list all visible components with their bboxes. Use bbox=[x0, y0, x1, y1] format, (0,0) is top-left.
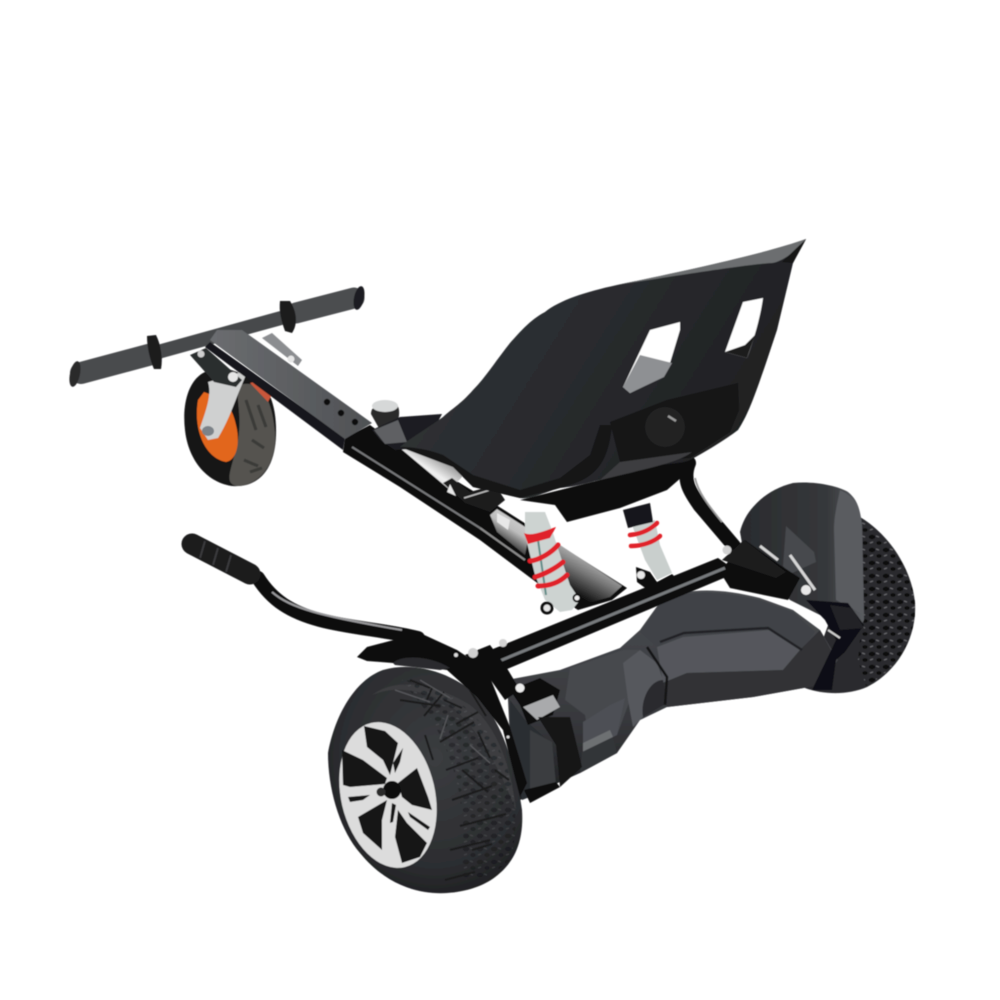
front wheel tire bbox=[328, 667, 522, 893]
front wheel alloy rim bbox=[326, 712, 450, 878]
left shock absorber spring bbox=[524, 512, 580, 613]
caster wheel bbox=[184, 368, 276, 486]
front fender bbox=[357, 633, 527, 797]
seat ventilation holes bbox=[623, 298, 763, 393]
strap on hoverboard bbox=[510, 678, 582, 803]
pressure gauge and seat rail bbox=[371, 400, 510, 530]
kart cross bar bbox=[465, 558, 738, 700]
seat shell bbox=[400, 239, 806, 498]
rear bracket and strap bbox=[720, 540, 864, 690]
right shock absorber spring bbox=[630, 520, 676, 590]
rear seat support arm bbox=[686, 463, 734, 546]
caster mounting plates bbox=[190, 333, 302, 387]
front handle with grip bbox=[192, 541, 418, 638]
kart main frame bar bbox=[205, 330, 627, 610]
hoverboard body bbox=[507, 590, 838, 800]
handlebar bbox=[67, 285, 366, 388]
seat underside mount bbox=[520, 455, 690, 528]
rear fender bbox=[740, 483, 864, 632]
rear wheel bbox=[805, 515, 915, 693]
